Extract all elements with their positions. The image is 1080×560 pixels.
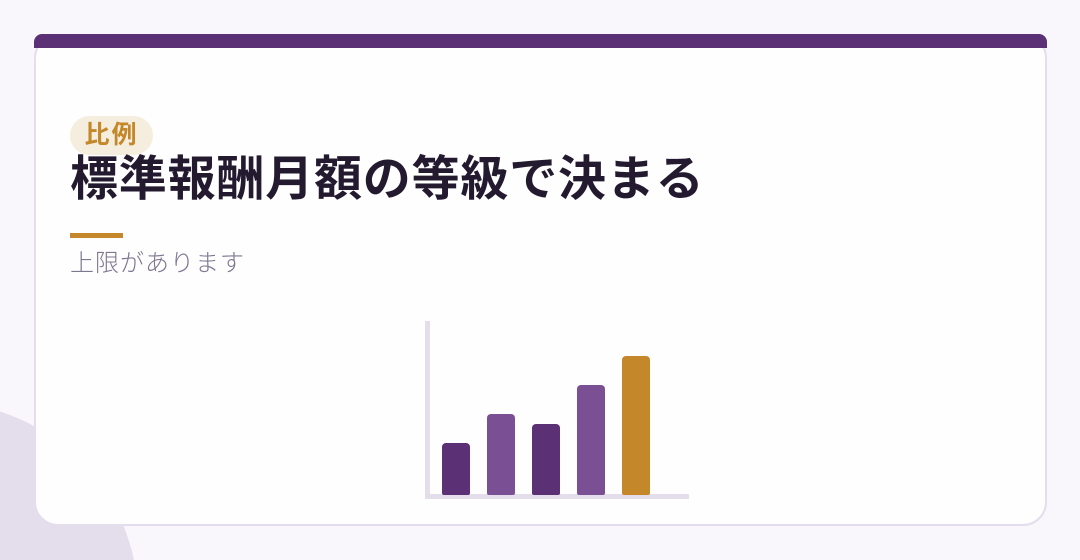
subtitle: 上限があります: [70, 250, 245, 277]
bar 3: [532, 424, 560, 495]
bar 5: highlighted: [622, 356, 650, 495]
y axis: [425, 321, 430, 499]
tag: 比例: [70, 116, 153, 155]
x axis: [425, 494, 689, 499]
bar 1: [442, 443, 470, 495]
decorative background circle: [0, 412, 134, 560]
bar chart: [425, 321, 689, 499]
tag: 比例: 比例: [84, 121, 138, 149]
title: 標準報酬月額の等級で決まる: [70, 153, 704, 206]
accent rule: [70, 233, 123, 238]
card top accent bar: [34, 34, 1047, 48]
bar 4: [577, 385, 605, 495]
bar 2: [487, 414, 515, 495]
